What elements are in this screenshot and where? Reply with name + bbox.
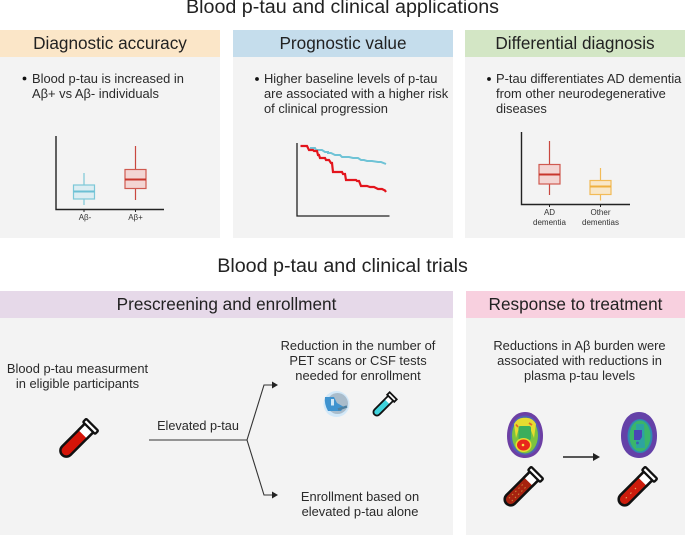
heading: prognostic value: Prognostic value — [279, 33, 407, 53]
text: enrollment on p-tau alone — [301, 489, 419, 519]
panel: differential diagnosis — [465, 30, 685, 238]
arrow: treatment effect — [563, 453, 600, 461]
text: prognostic value: of clinical progression — [264, 101, 388, 116]
icon: brain PET after treatment — [621, 412, 657, 458]
heading: prescreening and enrollment: Prescreening and enrollment — [117, 294, 336, 314]
title: clinical trials: Blood p-tau and clinical trials — [217, 255, 468, 277]
text: response to treatment: associated with reductions in — [497, 353, 662, 368]
text: elevated p-tau label: Elevated p-tau — [157, 419, 239, 433]
text: differential diagnosis: diseases — [496, 101, 547, 116]
icon: blood tube after treatment — [614, 467, 657, 510]
text: diagnostic accuracy — [32, 71, 184, 101]
text: prognostic value — [264, 71, 448, 116]
heading: diagnostic accuracy: Diagnostic accuracy — [33, 33, 187, 53]
bullets — [23, 77, 491, 81]
text: response to treatment — [493, 338, 666, 383]
heading: prognostic value — [233, 30, 453, 57]
chart: amyloid box plot — [56, 136, 164, 222]
text: prognostic value: are associated with a higher risk — [264, 86, 448, 101]
icon: blood tube before treatment — [500, 467, 543, 510]
text: blood p-tau measurement: Blood p-tau measurment — [7, 361, 148, 376]
chart: dementia box plot: Other — [590, 208, 611, 217]
panel: response to treatment — [466, 291, 685, 535]
panel: prognostic value — [233, 30, 453, 238]
text: enrollment on p-tau alone: Enrollment based on — [301, 489, 419, 504]
text: response to treatment: Reductions in Aβ burden were — [493, 338, 666, 353]
text: reduction in tests — [281, 338, 436, 383]
text: diagnostic accuracy: Blood p-tau is increased in — [32, 71, 184, 86]
chart: progression curves — [297, 143, 390, 216]
panel: prescreening and enrollment — [0, 291, 453, 535]
text: differential diagnosis: from other neurodegenerative — [496, 86, 666, 101]
chart: dementia box plot: dementia — [533, 218, 566, 227]
chart: dementia box plot: AD — [544, 208, 555, 217]
text: reduction in tests: PET scans or CSF tests — [289, 353, 427, 368]
text: blood p-tau measurement: in eligible participants — [16, 376, 139, 391]
heading: diagnostic accuracy — [0, 30, 220, 57]
panel: diagnostic accuracy — [0, 30, 220, 238]
text: prognostic value: Higher baseline levels of p-tau — [264, 71, 437, 86]
heading: differential diagnosis: Differential diagnosis — [495, 33, 655, 53]
text: differential diagnosis — [496, 71, 682, 116]
icon: CSF tube — [371, 392, 397, 418]
text: reduction in tests: Reduction in the number of — [281, 338, 435, 353]
text: reduction in tests: needed for enrollment — [295, 368, 421, 383]
text: response to treatment: plasma p-tau levels — [524, 368, 635, 383]
chart: dementia box plot: dementias — [582, 218, 619, 227]
heading: prescreening and enrollment — [0, 291, 453, 318]
chart: amyloid box plot: Aβ- — [79, 213, 92, 222]
arrow: elevated p-tau branching — [149, 382, 278, 498]
icon: PET scanner — [324, 391, 350, 417]
text: blood p-tau measurement — [7, 361, 148, 391]
text: differential diagnosis: P-tau differentiates AD dementia — [496, 71, 681, 86]
chart: dementia box plot — [522, 132, 630, 227]
heading: response to treatment: Response to treatment — [489, 294, 662, 314]
text: diagnostic accuracy: Aβ+ vs Aβ- individuals — [32, 86, 159, 101]
chart: amyloid box plot: Aβ+ — [128, 213, 143, 222]
icon: brain PET before treatment — [507, 412, 543, 458]
icon: blood tube, participants — [56, 419, 98, 461]
heading: differential diagnosis — [465, 30, 685, 57]
heading: response to treatment — [466, 291, 685, 318]
text: enrollment on p-tau alone: elevated p-tau alone — [302, 504, 418, 519]
